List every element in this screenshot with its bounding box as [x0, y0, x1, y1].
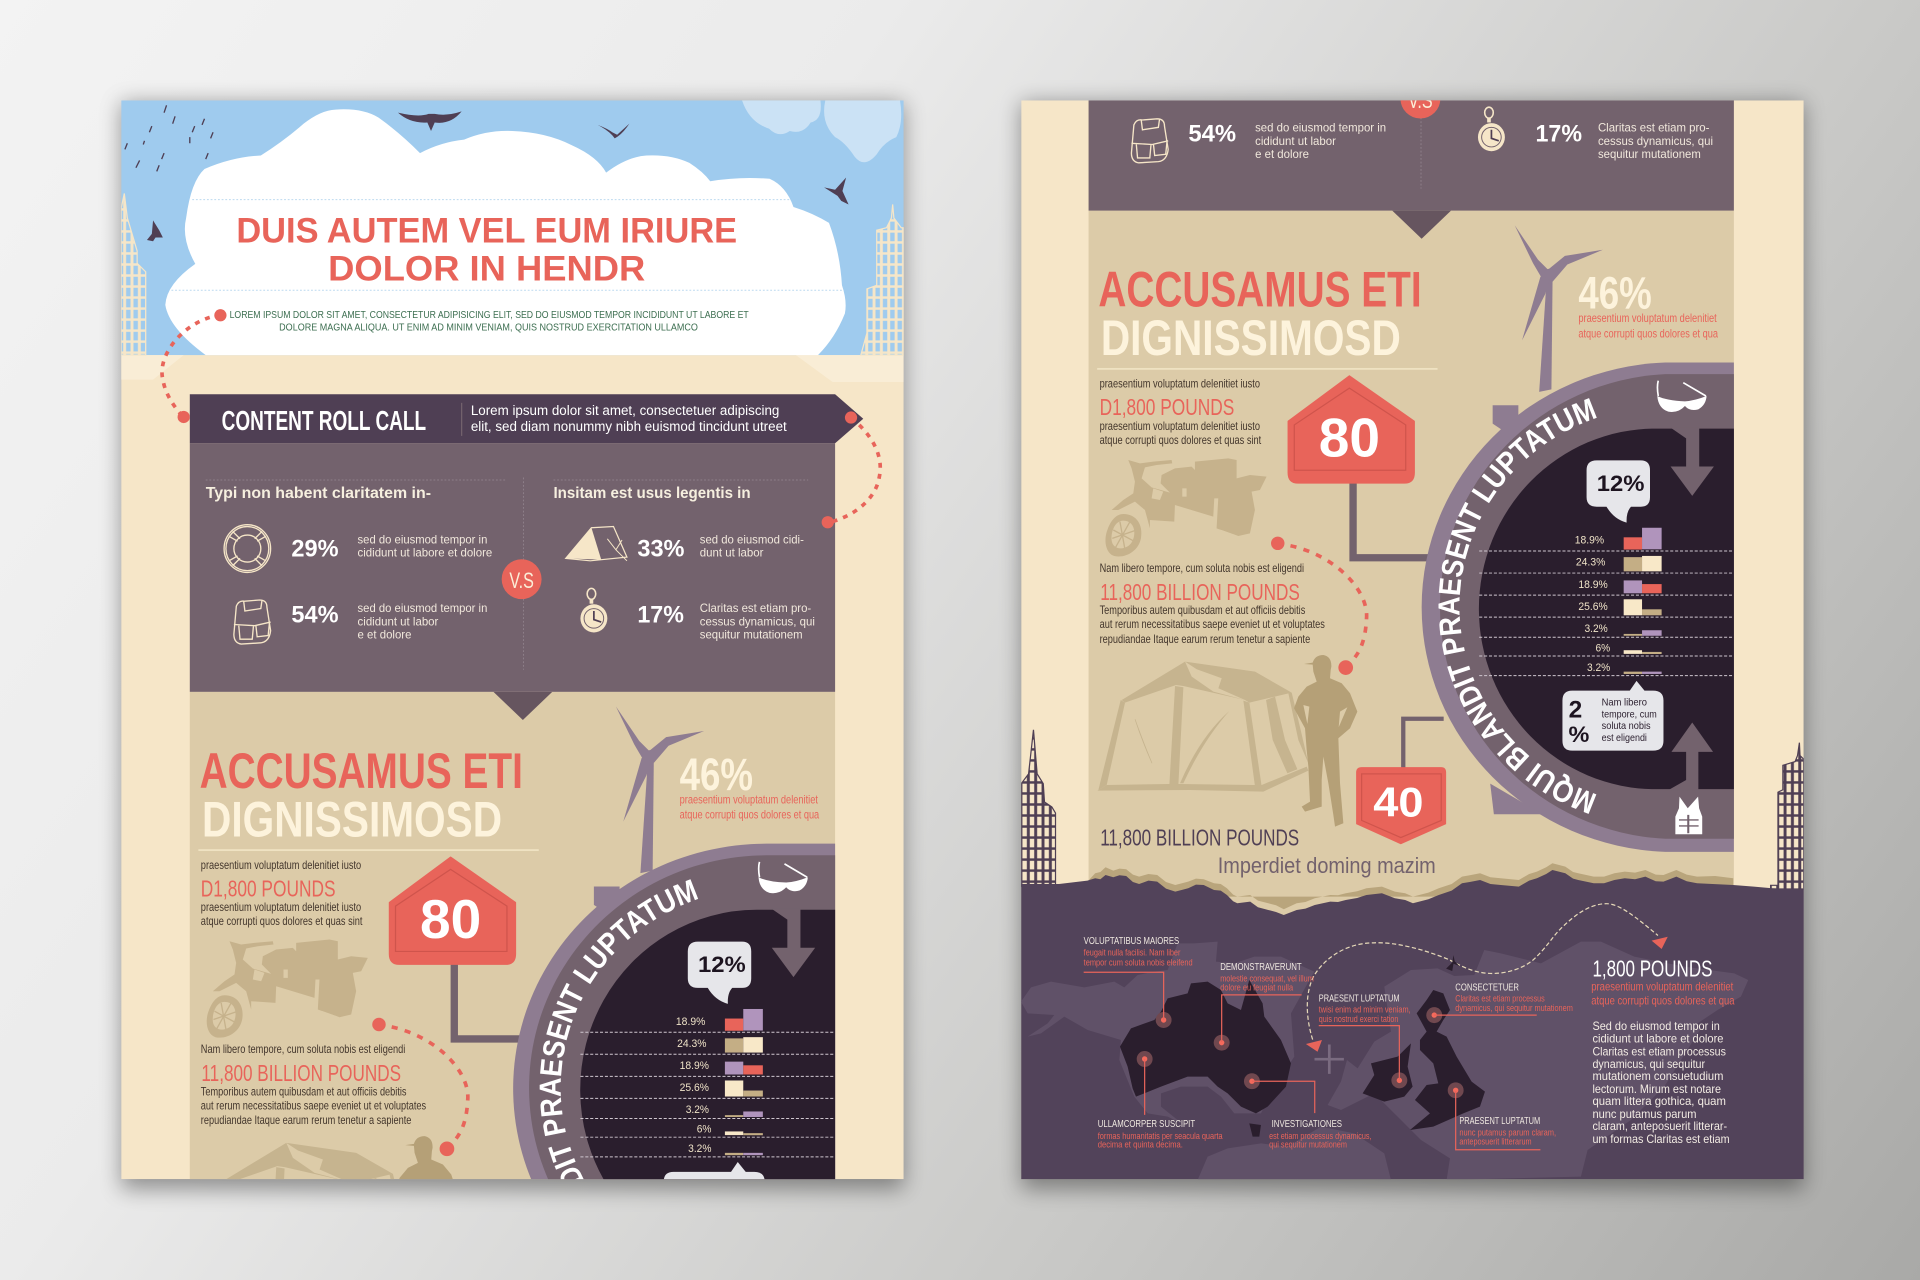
red dashed route right: [822, 411, 880, 528]
chart labels: 18.9%: [676, 1016, 705, 1028]
column headings: Typi non habent claritatem in-: [206, 485, 431, 502]
label: Investigationes: qui sequitur mutationem: [1269, 1139, 1347, 1149]
map: Australia: [1120, 980, 1291, 1137]
label: Demonstraverunt: dolore eu feugiat nulla: [1220, 983, 1294, 993]
route arrow heads: [1306, 937, 1668, 1052]
icon: stopwatch: [580, 588, 607, 632]
label: Voluptatibus: tempor cum soluta nobis eleifend: [1084, 958, 1193, 968]
stat 17 percent: sequitur mutationem: [1598, 148, 1701, 161]
right column paragraph: [1592, 1019, 1730, 1146]
stat 54 percent: [1188, 120, 1386, 161]
sky: [121, 100, 904, 358]
heading rule: [198, 849, 539, 851]
chart labels: 25.6%: [1578, 601, 1608, 613]
column headings: [206, 485, 751, 502]
right column paragraph: quam littera gothica, quam: [1592, 1094, 1726, 1108]
label: Praesent Luptatum: [1319, 994, 1411, 1024]
badge 80: 80: [420, 888, 481, 950]
right column paragraph: um formas Claritas est etiam: [1592, 1132, 1730, 1146]
map: Ireland: [1363, 1043, 1413, 1102]
stat 17 percent: [1536, 120, 1713, 161]
chart labels: 3.2%: [686, 1104, 709, 1116]
right column paragraph: nunc putamus parum: [1592, 1107, 1697, 1121]
label: Demonstraverunt: [1220, 962, 1314, 993]
cloud: [165, 109, 846, 355]
block: 11,800 billion pounds: Temporibus autem quibusdam et aut officiis debitis: [1100, 604, 1305, 617]
chart labels: 25.6%: [680, 1082, 709, 1094]
stats rules: [206, 478, 808, 670]
tent silhouette: [227, 1143, 394, 1179]
stats panel: [1089, 100, 1734, 211]
stat 17 percent: Claritas est etiam pro-: [700, 602, 811, 615]
block: 11,800 billion pounds: 11,800 BILLION POUNDS: [1100, 579, 1300, 605]
stat 29 percent: 29%: [291, 536, 339, 563]
chart labels: 18.9%: [680, 1060, 709, 1072]
block: D1,800 pounds: [201, 859, 363, 928]
label: Ullamcorper: [1098, 1119, 1223, 1149]
stat 17 percent: 17%: [637, 602, 684, 629]
stat 54 percent: 54%: [1188, 120, 1236, 147]
ring text: MQUI BLANDIT PRAESENT LUPTATUM: [1438, 398, 1597, 814]
birds: [125, 105, 849, 241]
subtitle: LOREM IPSUM DOLOR SIT AMET, CONSECTETUR ADIPISICING ELIT, SED DO EIUSMOD TEMPOR INCIDIDUNT UT LABORE ET: [230, 310, 749, 321]
label: Praesent Luptatum 2: anteposuerit litterarum: [1459, 1136, 1532, 1146]
label: Consectetuer: Claritas est etiam processus: [1455, 994, 1545, 1004]
right column paragraph: Claritas est etiam processus: [1592, 1045, 1726, 1059]
chart labels: 3.2%: [688, 1143, 712, 1155]
chart labels: 18.9%: [1575, 535, 1604, 547]
wind turbine: [1515, 225, 1603, 392]
sunglasses icon: [758, 862, 808, 893]
block: D1,800 pounds: D1,800 POUNDS: [1100, 394, 1234, 420]
triangle pointer: [493, 692, 552, 720]
red dashed route left: [162, 309, 227, 423]
chart labels: 18.9%: [1578, 579, 1608, 591]
life vest icon: [1675, 797, 1702, 834]
plus mark: [1314, 1044, 1344, 1074]
label: Voluptatibus: [1084, 936, 1193, 968]
ring: [1422, 362, 1734, 852]
block: D1,800 pounds: praesentium voluptatum delenitiet iusto: [1100, 420, 1260, 433]
chart labels: 6%: [697, 1124, 712, 1136]
label: Ullamcorper: ULLAMCORPER SUSCIPIT: [1098, 1119, 1196, 1130]
man silhouette: [399, 1136, 453, 1180]
stat 33 percent: [637, 534, 804, 563]
46 percent: [1578, 268, 1718, 340]
ground: [1021, 100, 1804, 1179]
triangle pointer: [1392, 211, 1451, 239]
stat 54 percent: 54%: [291, 602, 339, 629]
chart labels: [1575, 535, 1610, 674]
stats panel: [190, 443, 835, 692]
header divider: [461, 403, 462, 436]
torn edge shadow: [1087, 863, 1733, 909]
left skyscraper: [121, 193, 146, 355]
block: 11,800 billion pounds: 11,800 BILLION POUNDS: [201, 1060, 401, 1086]
caption dark: 11,800 BILLION POUNDS: [1100, 825, 1299, 851]
block: 11,800 billion pounds: Nam libero tempore, cum soluta nobis est eligendi: [1100, 562, 1304, 575]
page 1: [121, 100, 904, 1180]
right column: 1,800 pounds: [1591, 956, 1735, 1008]
stat 54 percent: e et dolore: [358, 629, 411, 642]
icon: life buoy: [224, 525, 271, 572]
stat 33 percent: sed do eiusmod cidi-: [700, 534, 804, 547]
bubble 12 percent: [688, 942, 751, 1004]
bar chart: [1479, 528, 1734, 676]
tan panel: [1089, 211, 1734, 945]
badge 80: 80: [1319, 407, 1380, 469]
chart labels: 3.2%: [1584, 623, 1608, 635]
label: Praesent Luptatum: quis nostrud exerci tation: [1319, 1014, 1398, 1024]
ring: [513, 844, 835, 1182]
bubble 12 percent: 12%: [698, 952, 746, 977]
left skyscraper: [1021, 730, 1056, 887]
page shadows: [121, 103, 1804, 1189]
caption: Imperdiet doming mazim: [1218, 853, 1436, 878]
heading rule: [1097, 368, 1438, 370]
right column paragraph: claram, anteposuerit litterar-: [1592, 1119, 1727, 1133]
stat 54 percent: cididunt ut labor: [358, 616, 438, 629]
ring arrow down: [1658, 427, 1714, 496]
stat 17 percent: cessus dynamicus, qui: [1598, 135, 1713, 148]
block: D1,800 pounds: praesentium voluptatum delenitiet iusto: [1100, 378, 1260, 391]
heading: ACCUSAMUS ETI: [1098, 262, 1422, 318]
badge 40: [1356, 767, 1446, 844]
right column: 1,800 pounds: praesentium voluptatum delenitiet: [1591, 980, 1734, 994]
page 2: [1021, 100, 1804, 1180]
motorcycle silhouette: [207, 940, 368, 1038]
header title: CONTENT ROLL CALL: [222, 405, 426, 436]
flight route: [1307, 904, 1658, 1040]
stat 29 percent: cididunt ut labore et dolore: [358, 547, 492, 560]
block: D1,800 pounds: [1100, 378, 1262, 447]
bubble 12 percent: [1587, 460, 1650, 523]
block: D1,800 pounds: praesentium voluptatum delenitiet iusto: [201, 901, 361, 914]
heading: [1098, 262, 1422, 366]
badge 40: 40: [1373, 779, 1423, 826]
stat 29 percent: sed do eiusmod tempor in: [358, 534, 487, 547]
label: Investigationes: INVESTIGATIONES: [1272, 1119, 1342, 1130]
label: Praesent Luptatum 2: nunc putamus parum claram,: [1459, 1128, 1556, 1138]
content section, page 1: [190, 443, 836, 1180]
V.S badge: [502, 559, 542, 599]
header text: [471, 403, 787, 434]
chart labels: 6%: [1596, 642, 1610, 654]
ring text: DIT PRAESENT LUPTATUM: [540, 879, 698, 1180]
column headings: Insitam est usus legentis in: [553, 485, 751, 502]
stat 17 percent: sequitur mutationem: [700, 629, 803, 642]
icon: backpack: [1131, 119, 1168, 163]
block: D1,800 pounds: praesentium voluptatum delenitiet iusto: [201, 859, 361, 872]
label: Investigationes: est etiam processus dynamicus,: [1269, 1131, 1371, 1141]
stat 54 percent: sed do eiusmod tempor in: [358, 602, 487, 615]
bubble 2 percent: [664, 1162, 764, 1180]
header text: elit, sed diam nonummy nibh euismod tincidunt utreet: [471, 419, 787, 434]
man silhouette: [1294, 655, 1357, 827]
block: 11,800 billion pounds: aut rerum necessitatibus saepe eveniet ut et voluptates: [1100, 618, 1325, 631]
red dashed route: [372, 1018, 468, 1156]
stat 17 percent: [637, 602, 815, 642]
block: 11,800 billion pounds: Temporibus autem quibusdam et aut officiis debitis: [201, 1085, 407, 1098]
bar chart: [580, 1009, 835, 1157]
title: [238, 218, 736, 281]
header text: Lorem ipsum dolor sit amet, consectetuer adipiscing: [471, 403, 779, 418]
chart labels: [676, 1016, 712, 1155]
title rules: [171, 200, 842, 290]
block: 11,800 billion pounds: Nam libero tempore, cum soluta nobis est eligendi: [201, 1043, 405, 1056]
icon: plane: [1446, 955, 1460, 971]
label: Ullamcorper: formas humanitatis per seacula quarta: [1098, 1131, 1223, 1141]
label: Voluptatibus: feugait nulla facilisi. Nam liber: [1084, 948, 1180, 958]
stat 54 percent: [291, 602, 487, 642]
right column: 1,800 pounds: atque corrupti quos dolores et qua: [1591, 994, 1735, 1008]
46 percent: 46%: [1578, 268, 1652, 319]
tan panel: [190, 692, 835, 1179]
map continents: [1021, 942, 1748, 1180]
ring arrow: [772, 910, 815, 977]
chart labels: 24.3%: [677, 1038, 707, 1050]
label: Consectetuer: dynamicus, qui sequitur mutationem: [1455, 1003, 1573, 1013]
icon: tent: [566, 527, 627, 561]
right column paragraph: cididunt ut labore et dolore: [1592, 1032, 1724, 1046]
label: Investigationes: [1269, 1119, 1371, 1149]
title: DUIS AUTEM VEL EUM IRIURE: [236, 210, 737, 250]
sunglasses icon: [1657, 381, 1707, 412]
right column: 1,800 pounds: 1,800 POUNDS: [1592, 956, 1712, 982]
block: 11,800 billion pounds: [201, 1043, 426, 1127]
stat 33 percent: 33%: [637, 536, 685, 563]
block: 11,800 billion pounds: repudiandae Itaque earum rerum tenetur a sapiente: [201, 1114, 411, 1127]
bubble 2 percent: est eligendi: [1602, 733, 1647, 744]
46 percent: atque corrupti quos dolores et qua: [1578, 327, 1718, 340]
label: Demonstraverunt: molestie consequat, vel illum: [1220, 973, 1314, 983]
stat 17 percent: Claritas est etiam pro-: [1598, 122, 1710, 135]
ring arrow up: [1654, 722, 1713, 791]
heading: [200, 753, 520, 837]
right column paragraph: mutationem consuetudium: [1592, 1069, 1723, 1083]
46 percent: atque corrupti quos dolores et qua: [680, 809, 820, 822]
46 percent: praesentium voluptatum delenitiet: [1578, 312, 1717, 325]
chart labels: 3.2%: [1587, 662, 1610, 674]
block: 11,800 billion pounds: repudiandae Itaque earum rerum tenetur a sapiente: [1100, 633, 1310, 646]
bubble 2 percent: soluta nobis: [1602, 721, 1651, 732]
bubble 2 percent: [1562, 681, 1663, 751]
stat 29 percent: [291, 534, 492, 563]
chart labels: 24.3%: [1576, 557, 1605, 569]
stat 17 percent: 17%: [1536, 120, 1582, 147]
header bar: [190, 394, 863, 443]
bubble 12 percent: 12%: [1597, 471, 1645, 496]
bubble 2 percent: Nam libero: [1602, 697, 1647, 708]
right column paragraph: Sed do eiusmod tempor in: [1592, 1019, 1720, 1033]
connector: [1353, 482, 1434, 558]
ground: [121, 355, 904, 1179]
tent silhouette: [1097, 662, 1308, 792]
badge 80: [1288, 376, 1414, 483]
block: D1,800 pounds: D1,800 POUNDS: [201, 875, 336, 901]
V.S badge: V.S: [1408, 88, 1433, 113]
subtitle: DOLORE MAGNA ALIQUA. UT ENIM AD MINIM VENIAM, QUIS NOSTRUD EXERCITATION ULLAMCO: [279, 323, 698, 334]
block: 11,800 billion pounds: aut rerum necessitatibus saepe eveniet ut et voluptates: [201, 1099, 426, 1112]
block: D1,800 pounds: atque corrupti quos dolores et quas sint: [1100, 434, 1262, 447]
bubble 2 percent: %: [1569, 722, 1590, 747]
right column paragraph: dynamicus, qui sequitur: [1592, 1057, 1705, 1071]
bubble 2 percent: tempore, cum: [1602, 710, 1657, 721]
map pins: [1137, 1007, 1464, 1098]
right column paragraph: lectorum. Mirum est notare: [1592, 1082, 1721, 1096]
badge 80: [389, 857, 516, 964]
motorcycle silhouette: [1105, 458, 1267, 556]
bubble 2 percent: 2: [1569, 697, 1582, 724]
V.S badge: V.S: [509, 568, 534, 593]
right skyscraper: [861, 204, 904, 355]
connector to badge 40: [1403, 719, 1444, 768]
stat 54 percent: cididunt ut labor: [1255, 135, 1336, 148]
stat 33 percent: dunt ut labor: [700, 547, 764, 560]
label: Praesent Luptatum: twisi enim ad minim veniam,: [1319, 1005, 1411, 1015]
label: Praesent Luptatum 2: [1459, 1116, 1556, 1146]
label: Voluptatibus: VOLUPTATIBUS MAIORES: [1084, 936, 1179, 947]
label: Ullamcorper: decima et quinta decima.: [1098, 1139, 1183, 1149]
label: Praesent Luptatum 2: PRAESENT LUPTATUM: [1459, 1116, 1540, 1127]
light clouds: [742, 100, 901, 162]
connector: [450, 964, 520, 1043]
ground reflection: [121, 355, 904, 382]
46 percent: praesentium voluptatum delenitiet: [680, 793, 819, 806]
stat 54 percent: sed do eiusmod tempor in: [1255, 122, 1386, 135]
heading: DIGNISSIMOSD: [202, 791, 502, 847]
title: DOLOR IN HENDR: [328, 248, 645, 288]
label: Demonstraverunt: DEMONSTRAVERUNT: [1220, 962, 1302, 973]
stat 54 percent: e et dolore: [1255, 148, 1309, 161]
stat 17 percent: cessus dynamicus, qui: [700, 616, 815, 629]
red dashed route: [1271, 537, 1367, 675]
heading: ACCUSAMUS ETI: [200, 743, 523, 799]
label: Consectetuer: CONSECTETUER: [1455, 983, 1519, 994]
46 percent: [680, 758, 820, 821]
label: Consectetuer: [1455, 983, 1573, 1013]
label: Praesent Luptatum: PRAESENT LUPTATUM: [1319, 994, 1400, 1005]
block: 11,800 billion pounds: [1100, 562, 1325, 646]
wind turbine: [616, 707, 704, 873]
block: D1,800 pounds: atque corrupti quos dolores et quas sint: [201, 915, 363, 928]
46 percent: 46%: [680, 749, 753, 800]
icon: backpack: [234, 600, 271, 644]
icon: stopwatch: [1478, 107, 1505, 151]
stats divider: [1420, 110, 1422, 189]
map panel: [1021, 870, 1804, 1180]
right skyscraper: [1771, 743, 1804, 889]
map leader lines: [1084, 972, 1540, 1150]
heading: DIGNISSIMOSD: [1101, 310, 1401, 366]
V.S badge: [1400, 79, 1440, 119]
subtitle: [230, 311, 748, 332]
map: Great Britain: [1410, 990, 1485, 1130]
